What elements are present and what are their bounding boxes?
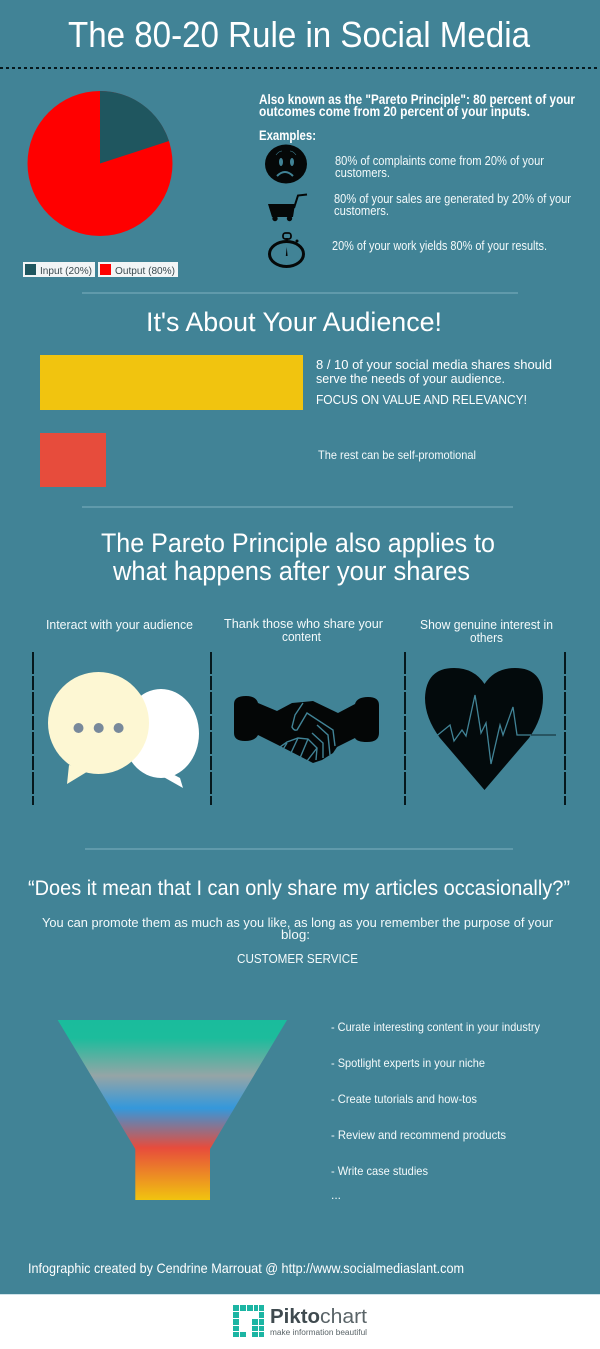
legend: Output (80%): [115, 266, 175, 277]
panel: after your shares: [33, 528, 565, 805]
text: serve your audience: [316, 357, 552, 407]
list of content ideas: - Curate interesting content in your industry: [331, 1020, 540, 1034]
column label: interest: [420, 617, 553, 645]
heading: after your shares: what happens after your shares: [112, 556, 470, 586]
answer text: blog:: [281, 927, 310, 942]
icon: heart with pulse: [425, 668, 556, 790]
answer text: You can promote them as much as you like, as long as you remember the purpose of your: [42, 915, 554, 930]
icon: handshake: [234, 696, 379, 763]
heading: after your shares: [101, 528, 495, 586]
logo wordmark: make information beautiful: [270, 1328, 367, 1337]
logo wordmark: Pikto: [270, 1306, 320, 1328]
list of content ideas: [331, 1020, 540, 1202]
icon: Piktochart logo: [233, 1305, 264, 1337]
column label: thank: [224, 616, 384, 644]
logo wordmark: [270, 1306, 367, 1337]
column label: interest: others: [470, 630, 503, 645]
list of content ideas: - Spotlight experts in your niche: [331, 1056, 485, 1070]
icon: funnel: [58, 1020, 287, 1200]
bar: 80 percent: [40, 355, 303, 410]
panel: audience: [40, 307, 552, 487]
icon: stopwatch: [270, 233, 304, 266]
text: serve your audience: 8 / 10 of your social media shares should: [316, 357, 552, 372]
column label: interest: Show genuine interest in: [420, 617, 553, 632]
legend: [23, 262, 178, 277]
footer band: Piktochart: [0, 1294, 600, 1349]
icon: sad face: [265, 144, 307, 184]
list of content ideas: - Review and recommend products: [331, 1128, 506, 1142]
list of content ideas: - Create tutorials and how-tos: [331, 1092, 477, 1106]
list of content ideas: ...: [331, 1188, 341, 1202]
column label: thank: Thank those who share your: [224, 616, 384, 631]
example text: work: 20% of your work yields 80% of your results.: [332, 239, 547, 253]
logo wordmark: chart: [320, 1306, 367, 1328]
examples label: Examples:: [259, 128, 316, 143]
example text: sales: customers.: [334, 204, 389, 218]
text: serve your audience: FOCUS ON VALUE AND RELEVANCY!: [316, 392, 527, 407]
example text: complaints: customers.: [335, 166, 390, 180]
answer text: CUSTOMER SERVICE: [237, 952, 358, 966]
pie chart: [28, 91, 172, 236]
quote heading: “Does it mean that I can only share my articles occasionally?”: [28, 877, 570, 900]
footer credit: Infographic created by Cendrine Marrouat @ http://www.socialmediaslant.com: [28, 1260, 464, 1276]
heading: audience: It's About Your Audience!: [146, 307, 442, 337]
text: self-promotional: The rest can be self-promotional: [318, 448, 476, 462]
bar: 20 percent: [40, 433, 106, 487]
column label: interact: Interact with your audience: [46, 617, 193, 632]
panel: pie chart: [23, 91, 178, 277]
example text: complaints: 80% of complaints come from 20% of your: [335, 154, 544, 168]
heading: after your shares: The Pareto Principle also applies to: [101, 528, 495, 558]
panel: share articles question: [28, 877, 570, 1202]
list of content ideas: - Write case studies: [331, 1164, 428, 1178]
icon: shopping cart: [268, 194, 307, 221]
definition text: outcomes come from 20 percent of your inputs.: [259, 104, 530, 119]
title: The 80-20 Rule in Social Media: [68, 14, 531, 55]
example text: complaints: [335, 154, 544, 180]
legend: Input (20%): [40, 266, 92, 277]
example text: sales: 80% of your sales are generated by 20% of your: [334, 192, 571, 206]
text: serve your audience: serve the needs of your audience.: [316, 371, 505, 386]
icon: speech bubbles: [48, 672, 199, 788]
answer text: [42, 915, 554, 966]
panel: pareto principle definition: [259, 92, 576, 266]
definition text: [259, 92, 576, 119]
column label: thank: content: [282, 629, 321, 644]
example text: sales: [334, 192, 571, 218]
